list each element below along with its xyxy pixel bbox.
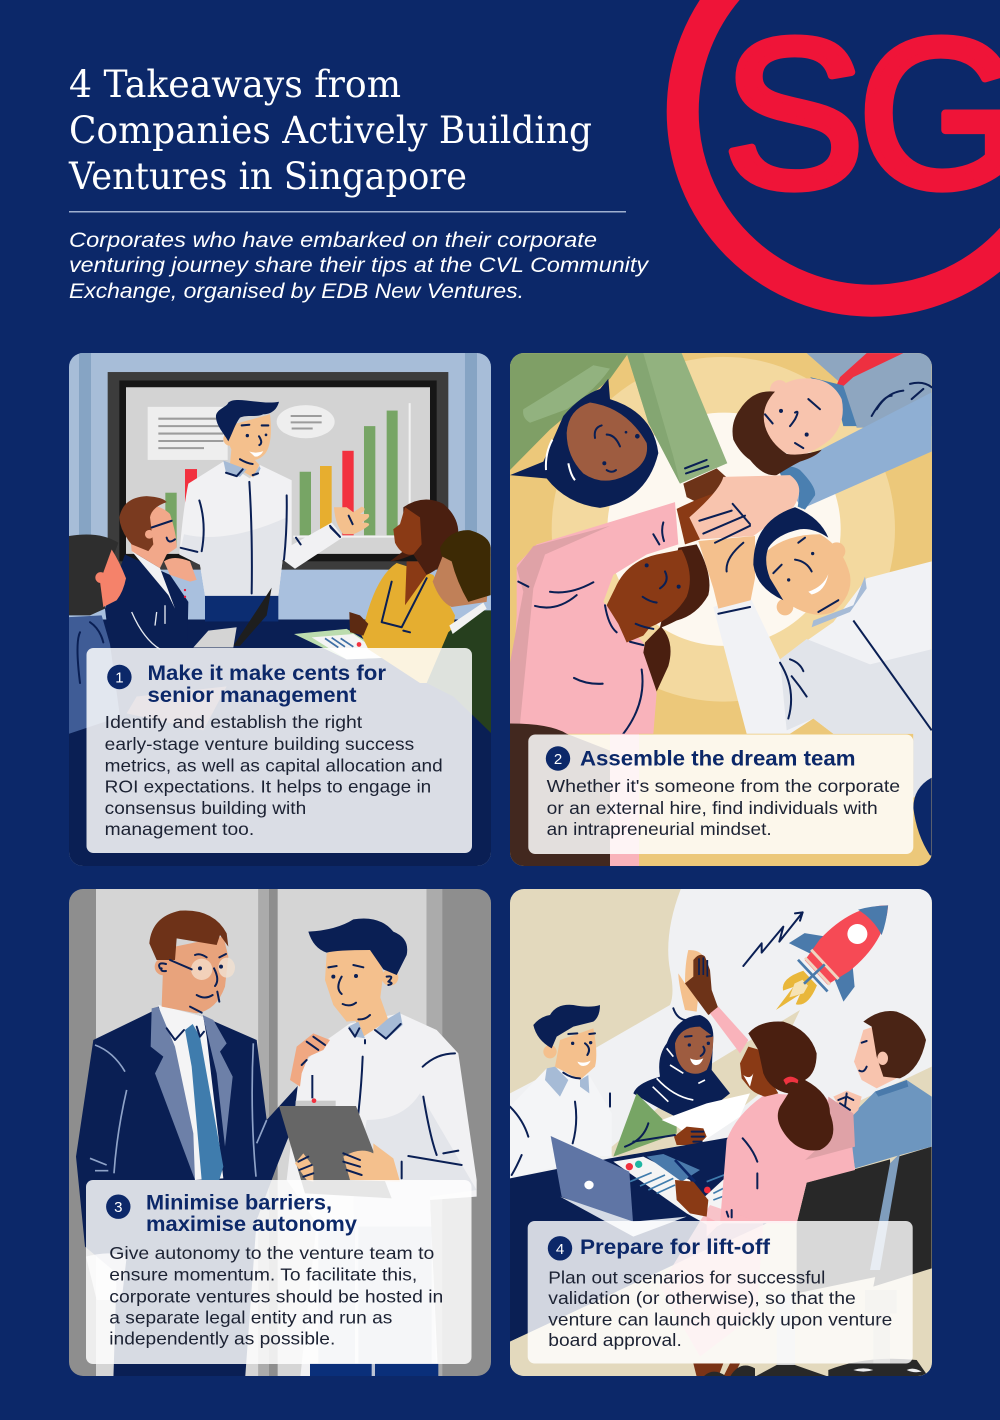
man at right: [847, 1080, 932, 1168]
high five hands: [678, 950, 703, 1012]
body text 4: [548, 1267, 892, 1350]
illustration: team high five and rocket: [500, 876, 940, 1395]
heading 3: [146, 1192, 357, 1236]
presenter shirt: [179, 462, 343, 596]
heading 3: maximise autonomy: [146, 1213, 357, 1236]
subtitle: Exchange, organised by EDB New Ventures.: [69, 280, 524, 303]
badge 2: 2: [554, 751, 562, 768]
panel: takeaway 1: [60, 345, 500, 875]
body text 1: management too.: [105, 819, 254, 839]
green sleeve person: [510, 353, 628, 470]
rocket: [749, 876, 915, 1039]
panel: takeaway 4: [500, 876, 940, 1395]
body text 4: Plan out scenarios for successful: [548, 1267, 825, 1287]
panel: takeaway 3: [60, 880, 500, 1385]
heading 1: senior management: [148, 684, 356, 707]
badge 1: [107, 665, 132, 689]
text card 3: [86, 1180, 472, 1364]
woman at left: [69, 615, 120, 734]
title: Companies Actively Building: [69, 109, 592, 152]
badge 3: 3: [114, 1199, 122, 1216]
body text 1: [105, 712, 443, 839]
body text 2: Whether it's someone from the corporate: [547, 776, 900, 796]
heading 2: Assemble the dream team: [580, 748, 856, 770]
heading 1: [148, 662, 386, 707]
body text 3: corporate ventures should be hosted in: [109, 1286, 443, 1306]
body text 1: early-stage venture building success: [105, 734, 414, 754]
body text 2: [547, 776, 900, 839]
badge 1: 1: [115, 670, 124, 686]
peach hand: [698, 536, 755, 609]
white backdrop: [510, 887, 932, 1180]
hijab head: [510, 379, 658, 508]
body text 3: a separate legal entity and run as: [109, 1307, 393, 1327]
badge 4: 4: [556, 1241, 564, 1258]
body text 2: or an external hire, find individuals with: [547, 798, 878, 818]
navy table and lower area: [60, 619, 500, 875]
body text 3: [109, 1243, 443, 1348]
man in navy suit: [105, 554, 188, 620]
logo: SG ring: [683, 0, 1000, 301]
heading 1: Make it make cents for: [148, 662, 386, 685]
heading 4: Prepare for lift-off: [580, 1236, 771, 1259]
body text 1: consensus building with: [105, 798, 306, 818]
body text 2: an intrapreneurial mindset.: [547, 819, 772, 839]
woman in pink: [707, 1093, 855, 1237]
body text 4: venture can launch quickly upon venture: [548, 1310, 892, 1330]
badge 3: [106, 1194, 130, 1219]
body text 3: independently as possible.: [109, 1328, 335, 1348]
documents: [294, 628, 378, 659]
heading 3: Minimise barriers,: [146, 1192, 332, 1214]
trousers: [205, 594, 278, 621]
body text 4: board approval.: [548, 1330, 682, 1350]
panel: takeaway 2: [500, 345, 940, 875]
title: Ventures in Singapore: [68, 155, 467, 198]
faint hands behind card: [127, 686, 227, 730]
man in suit: [76, 1007, 303, 1380]
woman head: [643, 544, 709, 691]
body text 1: Identify and establish the right: [105, 712, 362, 732]
badge 4: [548, 1236, 572, 1261]
dark skirt: [510, 724, 610, 867]
illustration: boardroom presentation: [60, 345, 500, 875]
subtitle: venturing journey share their tips at the CVL Community: [69, 254, 650, 277]
woman in yellow: [362, 563, 455, 683]
presenter head: [216, 400, 279, 477]
man at left: [510, 1068, 612, 1178]
title: 4 Takeaways from: [69, 63, 401, 106]
title: [68, 63, 592, 198]
body text 3: ensure momentum. To facilitate this,: [109, 1265, 417, 1285]
man in white shirt: [287, 1013, 477, 1380]
badge 2: [546, 746, 570, 771]
chair base and legs: [693, 1363, 740, 1377]
brown hand: [676, 494, 713, 544]
man in green: [427, 610, 492, 734]
arrow zigzag: [743, 912, 803, 966]
body text 1: metrics, as well as capital allocation and: [105, 756, 443, 776]
man head bottom right: [765, 534, 850, 615]
white shirt person: [713, 561, 932, 798]
body text 1: ROI expectations. It helps to engage in: [105, 776, 431, 796]
blue suit person: [807, 353, 932, 428]
pink person: [510, 502, 678, 734]
presenter hand: [334, 507, 369, 534]
chairs: [797, 1159, 893, 1293]
head of man in suit: [162, 937, 228, 1013]
illustration: team hands together: [500, 345, 940, 875]
laptop: [551, 1136, 633, 1227]
faint hand below card: [86, 1253, 127, 1300]
clipboard: [279, 1075, 392, 1198]
body text 4: validation (or otherwise), so that the: [548, 1288, 856, 1308]
hand on shoulder: [290, 1033, 330, 1087]
text card 4: [528, 1221, 913, 1364]
text card 2: [528, 734, 913, 854]
papers: [613, 1157, 710, 1220]
body text 3: Give autonomy to the venture team to: [109, 1243, 434, 1263]
text card 1: [86, 648, 472, 853]
illustration: two colleagues with clipboard: [60, 880, 500, 1385]
subtitle: Corporates who have embarked on their corporate: [69, 229, 597, 252]
hands on clipboard: [295, 1153, 313, 1182]
laptop: [233, 588, 272, 646]
table: [510, 1137, 767, 1342]
woman in hijab: [633, 1015, 730, 1123]
subtitle: [69, 229, 650, 303]
man head top right: [762, 378, 843, 455]
